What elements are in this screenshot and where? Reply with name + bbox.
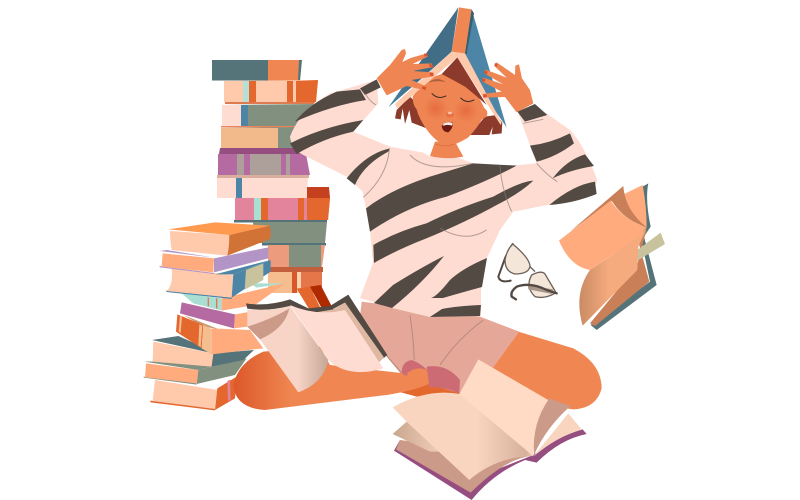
face <box>415 74 485 146</box>
stripes <box>290 79 597 317</box>
cheeks <box>424 96 448 120</box>
short book stack <box>143 222 285 410</box>
main left page <box>393 393 533 480</box>
nose <box>446 113 454 117</box>
eyes <box>432 94 474 102</box>
tan inner <box>396 440 530 493</box>
book pages on head <box>395 52 502 125</box>
tan page edge <box>310 303 384 368</box>
foot shadow <box>398 373 470 397</box>
dark cover <box>246 295 387 358</box>
ears <box>413 94 420 112</box>
book: bottom orange <box>150 377 237 410</box>
book: top orange <box>168 222 271 256</box>
standing right page <box>459 359 549 456</box>
sweater <box>290 79 597 317</box>
book: blue khaki <box>166 260 271 299</box>
eyebrow tuft <box>428 79 446 83</box>
flap <box>247 308 289 339</box>
right leg <box>463 332 602 409</box>
glasses and side book <box>498 183 665 330</box>
purple cover <box>394 429 587 500</box>
ribbon red <box>310 285 334 312</box>
fold lines <box>363 93 557 236</box>
book: purple <box>180 302 260 328</box>
right page <box>290 305 383 372</box>
ribbon orange <box>297 287 324 315</box>
hair back <box>395 97 427 128</box>
page curl <box>534 398 571 455</box>
book: mint <box>182 283 285 311</box>
book: grey green <box>143 358 247 385</box>
blue book wings <box>388 7 458 107</box>
left hand <box>377 49 434 95</box>
book: teal <box>152 336 254 367</box>
head with book on top <box>388 7 507 158</box>
foot <box>407 368 429 383</box>
socks <box>402 360 428 376</box>
left page <box>247 306 328 392</box>
side book <box>559 183 665 330</box>
shorts <box>360 302 519 393</box>
lower left page <box>393 422 440 452</box>
right lower page <box>533 413 582 457</box>
neck <box>430 142 463 158</box>
crossed legs <box>233 302 602 410</box>
left leg <box>233 347 430 410</box>
book: lavender <box>159 247 268 274</box>
right hand <box>482 62 533 112</box>
lap book <box>246 285 387 392</box>
front open book <box>393 359 587 500</box>
book: orange spine <box>176 314 263 354</box>
mouth <box>442 122 453 132</box>
hands <box>377 49 533 112</box>
tall book stack <box>212 60 330 293</box>
fringe <box>442 57 487 105</box>
glasses <box>498 244 557 299</box>
